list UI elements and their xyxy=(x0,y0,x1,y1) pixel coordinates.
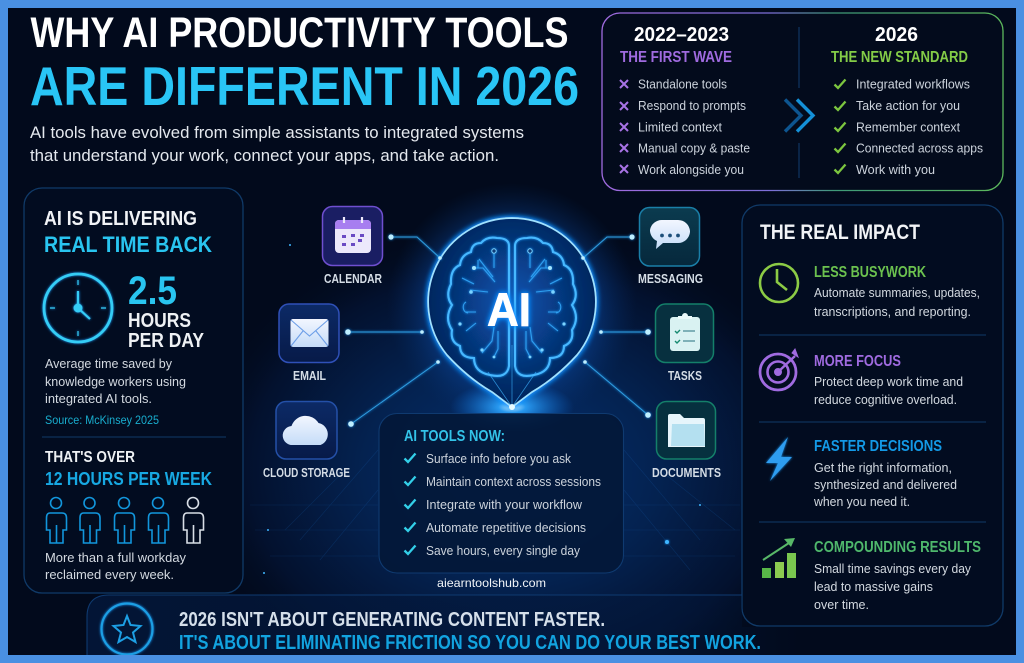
list: AI tools now: Automate repetitive decisions xyxy=(426,520,586,535)
background sparkles xyxy=(263,244,701,574)
title: WHY AI PRODUCTIVITY TOOLS xyxy=(30,9,568,57)
item: faster decisions: FASTER DECISIONS xyxy=(814,438,942,455)
item: less busywork: Automate summaries, updates, xyxy=(814,285,980,300)
icon: chevrons xyxy=(785,100,813,132)
label: MESSAGING xyxy=(638,272,703,286)
heading: 12 hours per week: THAT'S OVER xyxy=(45,449,135,466)
heading: real time back xyxy=(44,207,213,257)
label: CLOUD STORAGE xyxy=(263,466,350,480)
AI label: AI xyxy=(487,283,531,336)
icon: star badge xyxy=(102,604,152,654)
column: 2022-2023 first wave: Standalone tools xyxy=(638,76,727,92)
panel: comparison xyxy=(602,13,1003,190)
subtitle: that understand your work, connect your apps, and take action. xyxy=(30,147,499,165)
column: 2022-2023 first wave xyxy=(620,24,750,177)
item: more focus xyxy=(760,349,963,407)
list: AI tools now: Surface info before you ask xyxy=(426,451,571,466)
item: compounding results: lead to massive gains xyxy=(814,579,933,594)
item: faster decisions xyxy=(766,437,957,509)
icon tile: messaging xyxy=(638,208,703,286)
item: less busywork: LESS BUSYWORK xyxy=(814,264,926,281)
list: AI tools now: Save hours, every single day xyxy=(426,543,580,558)
column: 2022-2023 first wave: 2022–2023 xyxy=(634,24,729,46)
list: AI tools now: Integrate with your workflow xyxy=(426,497,583,512)
panel: AI tools now xyxy=(379,414,624,573)
heading: 12 hours per week: 12 HOURS PER WEEK xyxy=(45,468,213,489)
banner text: IT'S ABOUT ELIMINATING FRICTION SO YOU CAN DO YOUR BEST WORK. xyxy=(179,632,761,654)
item: more focus: MORE FOCUS xyxy=(814,353,901,370)
title xyxy=(30,9,579,117)
column: 2022-2023 first wave: THE FIRST WAVE xyxy=(620,49,732,66)
column: 2026 new standard: Take action for you xyxy=(856,98,960,113)
panel: AI tools now: AI TOOLS NOW: xyxy=(404,428,505,445)
label: TASKS xyxy=(668,369,702,383)
icon tile: calendar xyxy=(322,206,382,286)
heading: 12 hours per week xyxy=(45,449,213,489)
banner text: 2026 ISN'T ABOUT GENERATING CONTENT FASTER. xyxy=(179,609,605,631)
heading: real time back: AI IS DELIVERING xyxy=(44,207,197,230)
panel: real time back xyxy=(24,188,243,593)
text: average time saved xyxy=(45,356,186,406)
column: 2022-2023 first wave: Limited context xyxy=(638,120,722,134)
column: 2026 new standard: Connected across apps xyxy=(856,140,983,156)
perspective grid floor xyxy=(250,450,740,570)
item: faster decisions: Get the right information, xyxy=(814,460,952,475)
item: compounding results: COMPOUNDING RESULTS xyxy=(814,539,981,556)
text: average time saved: integrated AI tools. xyxy=(45,391,152,406)
item: more focus: reduce cognitive overload. xyxy=(814,392,957,407)
column: 2026 new standard: Remember context xyxy=(856,120,960,134)
icon: clock xyxy=(44,274,112,342)
column: 2022-2023 first wave: Respond to prompts xyxy=(638,98,746,113)
label: DOCUMENTS xyxy=(652,466,721,480)
panel: the real impact: THE REAL IMPACT xyxy=(760,220,920,244)
banner: bottom message xyxy=(87,595,800,655)
stat: 2.5 hours per day: 2.5 xyxy=(128,269,177,313)
item: faster decisions: synthesized and delivered xyxy=(814,477,957,492)
column: 2022-2023 first wave: Work alongside you xyxy=(638,162,744,177)
column: 2026 new standard: Work with you xyxy=(856,162,935,177)
text: full workday: More than a full workday xyxy=(45,550,186,565)
icon tile: email xyxy=(279,304,339,383)
item: compounding results xyxy=(762,538,981,612)
column: 2026 new standard xyxy=(831,24,983,177)
text: full workday xyxy=(45,550,186,582)
label: EMAIL xyxy=(293,369,326,383)
icon tile: cloud storage xyxy=(263,402,350,480)
heading: real time back: REAL TIME BACK xyxy=(44,232,213,257)
subtitle: AI tools have evolved from simple assistants to integrated systems xyxy=(30,124,524,142)
item: compounding results: Small time savings every day xyxy=(814,561,971,576)
list: AI tools now: Maintain context across sessions xyxy=(426,474,601,489)
text: average time saved: knowledge workers using xyxy=(45,374,186,389)
column: 2026 new standard: THE NEW STANDARD xyxy=(831,49,968,66)
item: faster decisions: when you need it. xyxy=(813,494,910,509)
column: 2022-2023 first wave: Manual copy & paste xyxy=(638,140,750,156)
item: less busywork: transcriptions, and reporting. xyxy=(814,304,971,319)
panel: the real impact xyxy=(742,205,1003,626)
text: average time saved: Average time saved by xyxy=(45,356,172,371)
item: compounding results: over time. xyxy=(814,597,869,612)
column: 2026 new standard: 2026 xyxy=(875,24,918,46)
column: 2026 new standard: Integrated workflows xyxy=(856,76,970,92)
source: Source: McKinsey 2025 xyxy=(45,413,159,427)
icon tile: documents xyxy=(652,402,721,480)
stat: 2.5 hours per day: HOURS xyxy=(128,309,191,332)
stat: 2.5 hours per day xyxy=(128,269,204,352)
banner text xyxy=(179,609,761,654)
text: full workday: reclaimed every week. xyxy=(45,567,174,582)
label: CALENDAR xyxy=(324,272,382,286)
stat: 2.5 hours per day: PER DAY xyxy=(128,329,204,352)
connectors xyxy=(345,234,651,427)
AI brain pin xyxy=(387,183,637,433)
icon tile: tasks xyxy=(656,304,714,383)
item: less busywork xyxy=(760,264,980,319)
website: aiearntoolshub.com xyxy=(437,576,546,590)
icon: five people xyxy=(46,498,204,543)
item: more focus: Protect deep work time and xyxy=(814,374,963,389)
title: ARE DIFFERENT IN 2026 xyxy=(30,56,579,117)
subtitle xyxy=(30,124,524,165)
list: AI tools now xyxy=(404,451,601,558)
